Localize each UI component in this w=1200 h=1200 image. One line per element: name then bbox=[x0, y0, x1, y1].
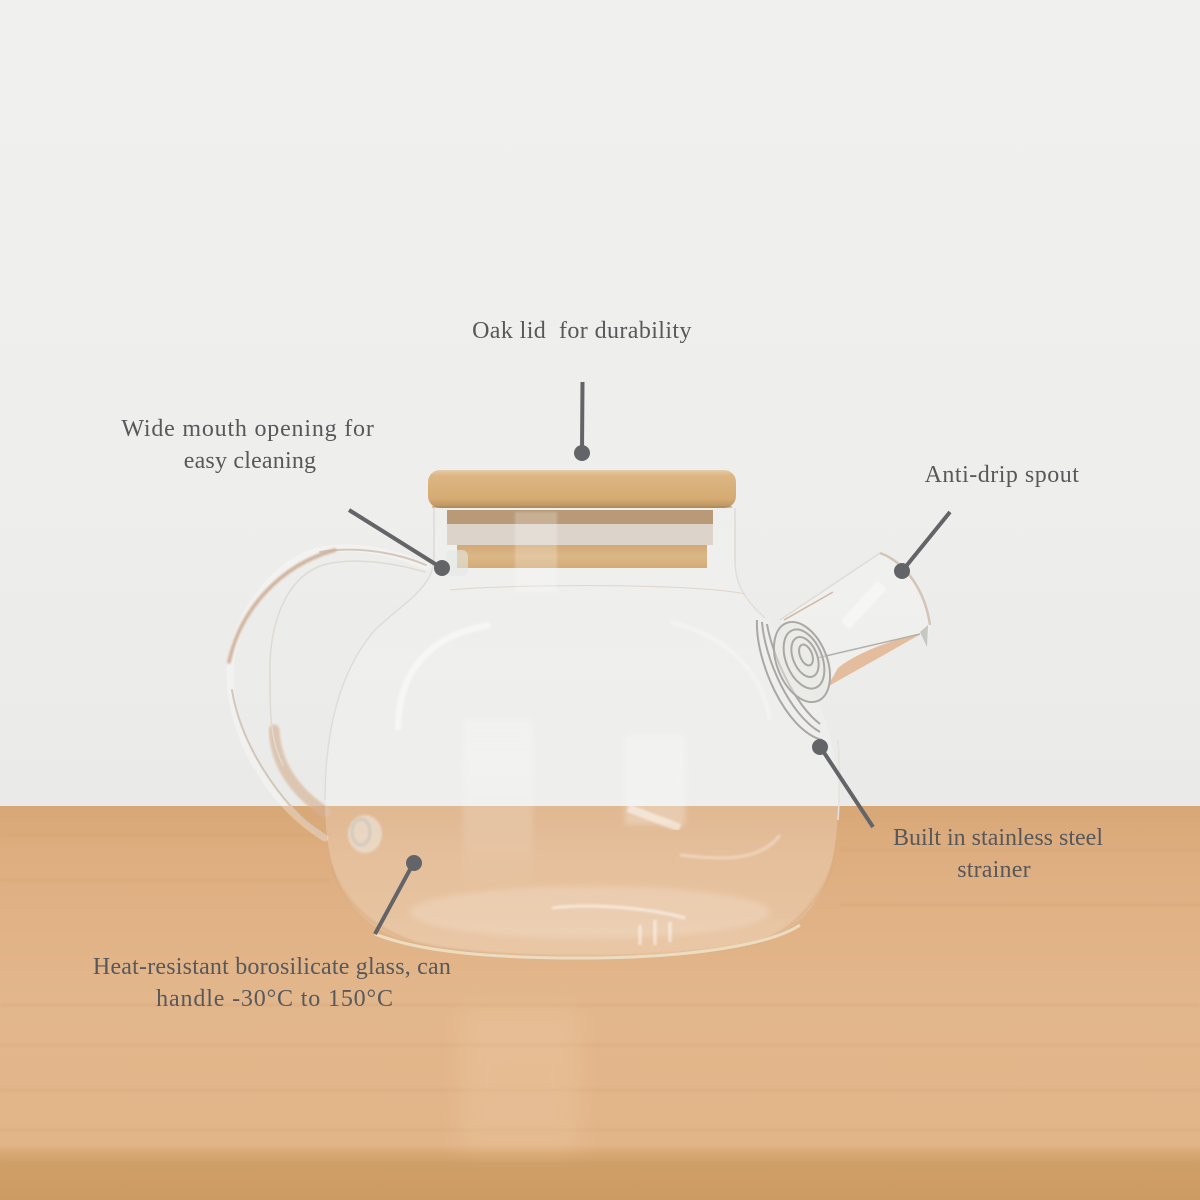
pointer: oak lid bbox=[574, 382, 590, 461]
label: strainer: strainer bbox=[957, 857, 1031, 883]
label: strainer bbox=[893, 825, 1103, 883]
label: anti-drip spout: Anti-drip spout bbox=[925, 462, 1079, 488]
label: wide mouth bbox=[121, 416, 375, 474]
shoulder line bbox=[450, 586, 745, 594]
label: oak lid: Oak lid for durability bbox=[472, 318, 692, 344]
label: glass bbox=[93, 954, 451, 1012]
pointer: glass bbox=[373, 855, 422, 935]
label: wide mouth: Wide mouth opening for bbox=[121, 416, 375, 442]
pointer: strainer bbox=[812, 739, 875, 828]
label: strainer: Built in stainless steel bbox=[893, 825, 1103, 851]
bamboo lid bbox=[428, 470, 736, 592]
wooden table bbox=[0, 806, 1200, 1200]
glass knob bbox=[348, 815, 382, 853]
label: glass: handle -30°C to 150°C bbox=[156, 986, 394, 1012]
strainer bbox=[757, 614, 841, 740]
pointer: wide mouth bbox=[348, 508, 450, 576]
glass reflections bbox=[398, 622, 780, 945]
neck glass bbox=[434, 508, 735, 576]
teapot bbox=[229, 470, 931, 958]
label: glass: Heat-resistant borosilicate glass, can bbox=[93, 954, 451, 980]
label: wide mouth: easy cleaning bbox=[184, 448, 316, 474]
wall background bbox=[0, 0, 1200, 808]
glass body bbox=[325, 510, 840, 958]
pointer: spout bbox=[894, 510, 952, 579]
glass handle bbox=[229, 548, 426, 838]
spout bbox=[780, 553, 931, 687]
